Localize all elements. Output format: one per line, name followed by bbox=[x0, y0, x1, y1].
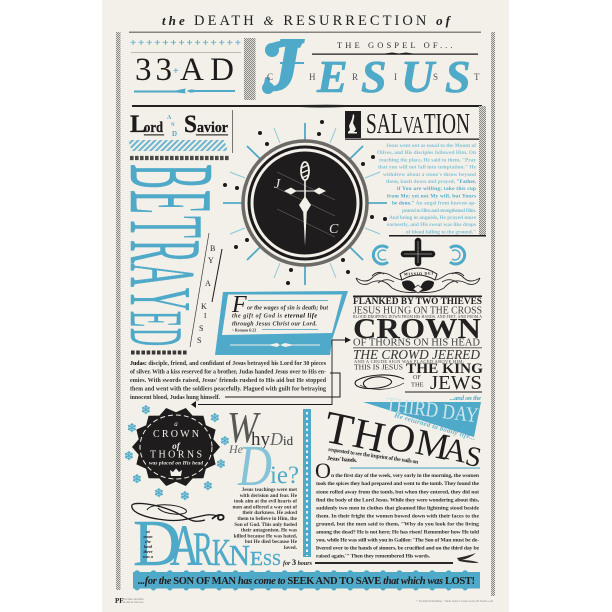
small letters: Christ: H bbox=[309, 72, 316, 82]
flourish: over Darkness bbox=[132, 503, 224, 521]
left patterned border bbox=[116, 32, 120, 590]
text: Crown headline stack: CROWN bbox=[353, 313, 481, 345]
text: Crown headline stack: JESUS HUNG ON THE CROSS bbox=[353, 306, 482, 316]
badge: a crown of thorns: CROWN bbox=[153, 429, 199, 440]
text: why did he die paragraph: took aim at the evil hearts of bbox=[234, 499, 297, 505]
title: Betrayed bbox=[104, 164, 239, 346]
text: why did he die paragraph: but He died because He bbox=[245, 539, 298, 545]
heading: Thomas: H bbox=[349, 410, 389, 462]
snowflake thorns: ❄ bbox=[127, 421, 137, 435]
hatched vertical block bbox=[244, 38, 256, 100]
text: Gethsemane: that you will not fall into temptation." He bbox=[378, 165, 477, 171]
snowflake thorns: ❄ bbox=[124, 449, 134, 463]
heading: Lord and Savior: avior bbox=[197, 120, 228, 136]
text: Gethsemane: Jesus went out as usual to the Mount of bbox=[386, 143, 476, 149]
by a kiss: S bbox=[199, 324, 203, 333]
heading: Jesus bbox=[262, 23, 471, 107]
panel: Romans quote: the gift of God is eternal life bbox=[232, 314, 317, 320]
text: first day paragraph: livered over to the hands of sinners, be crucified and on the third day be bbox=[316, 546, 479, 552]
heading: Why did he die: W bbox=[227, 403, 261, 452]
heading: Lord and Savior: D bbox=[172, 130, 177, 138]
heading: Darkness: R bbox=[193, 523, 213, 576]
emblem: dagger compass bbox=[223, 120, 387, 285]
text: first day paragraph: among the dead? He is not here; He has risen! Remember how He told bbox=[316, 530, 480, 536]
text: why did he die paragraph: their darkness. He asked bbox=[242, 510, 297, 516]
text: why did he die paragraph: loved. bbox=[284, 545, 298, 551]
heading: Why did he die bbox=[227, 403, 299, 498]
heading: Lord and Savior: N bbox=[171, 123, 175, 128]
heading: Salvation: SALVATION bbox=[366, 108, 470, 140]
text: Judas: emies. With swords raised, Jesus' friends rushed to His aid but He stopped bbox=[130, 378, 327, 384]
badge: a crown of thorns: a bbox=[174, 420, 178, 428]
text: Crown headline stack: THE KING bbox=[406, 361, 483, 377]
snowflake thorns: ❄ bbox=[203, 479, 213, 493]
banner: for the son of man bbox=[133, 572, 480, 588]
by a kiss: S bbox=[197, 336, 201, 345]
title: Betrayed: E bbox=[114, 311, 197, 327]
panel: Romans quote: F bbox=[231, 292, 247, 318]
heading: Why did he die: He bbox=[228, 442, 244, 456]
icon: crown bbox=[170, 468, 182, 476]
row of crosses: ++++++++++++++ bbox=[130, 37, 241, 49]
rule with swoosh bbox=[315, 553, 479, 564]
thick divider bbox=[132, 105, 482, 108]
badge: a crown of thorns: of bbox=[172, 441, 181, 451]
dot row bbox=[130, 156, 230, 160]
heading: Why did he die: ie? bbox=[270, 462, 299, 489]
heading: Why did he die: D bbox=[237, 433, 272, 498]
by a kiss: K bbox=[201, 302, 207, 311]
text: Gethsemane: peared to Him and strengthened Him. bbox=[402, 208, 477, 214]
snowflake thorns: ❄ bbox=[154, 486, 164, 500]
rings bbox=[243, 141, 367, 265]
teal rays bbox=[223, 123, 387, 285]
text: and on the: ...and on the bbox=[450, 395, 481, 402]
text: Judas: of silver. With a kiss reserved for a brother, Judas handed Jesus over to His en- bbox=[130, 370, 326, 376]
text: why did he die paragraph: men and offered a way out of bbox=[233, 504, 297, 510]
title: Betrayed: R bbox=[108, 240, 222, 263]
panel: 33 AD: + bbox=[173, 66, 179, 77]
heading: Darkness bbox=[133, 507, 281, 580]
icon: cross with banner bbox=[356, 241, 480, 293]
text: Gethsemane: them, knelt down and prayed, "Father, bbox=[386, 179, 477, 185]
text: Judas: them and went with the soldiers peacefully. Plagued with guilt for betraying bbox=[130, 386, 326, 392]
rule under Gethsemane bbox=[389, 235, 486, 236]
title: Betrayed: B bbox=[104, 164, 239, 189]
text: first day paragraph: them. In their fright the women bowed down with their faces to the bbox=[316, 514, 479, 520]
text: Judas bbox=[130, 361, 327, 401]
text: Crown headline stack: OF THORNS ON HIS HEAD bbox=[353, 338, 480, 348]
arrow from quote bbox=[332, 337, 351, 343]
heading: Jesus: S bbox=[361, 51, 387, 102]
top rule bbox=[129, 32, 481, 33]
text: first day paragraph: ground, but the men said to them, "Why do you look for the living bbox=[316, 522, 479, 528]
text: why did he die paragraph: their antagonism. He was bbox=[241, 528, 297, 534]
text: why did he die paragraph bbox=[233, 487, 298, 551]
small letters: Christ: R bbox=[352, 72, 358, 82]
vertical rule bbox=[231, 110, 234, 153]
text: first day paragraph bbox=[315, 458, 480, 560]
heading: Jesus: E bbox=[316, 51, 348, 102]
black dots bbox=[223, 120, 387, 285]
tiny text inside D: at bbox=[146, 529, 150, 534]
tiny text inside D bbox=[143, 529, 154, 559]
poster background bbox=[102, 0, 509, 612]
text: Crown headline stack: THE bbox=[411, 382, 424, 388]
text: requested to see: requested to see the imprint of the nails on bbox=[328, 447, 419, 466]
text: first day paragraph: n the first day of the week, very early in the morning, the women bbox=[331, 473, 480, 479]
banner bbox=[400, 268, 437, 280]
panel: Romans quote: ~ Romans 6:23 bbox=[232, 328, 256, 332]
text: why did he die paragraph: Son of God. This only fueled bbox=[234, 522, 297, 528]
heading: Darkness: N bbox=[229, 541, 250, 572]
text: Crown headline stack: THIS IS JESUS bbox=[354, 362, 403, 372]
hatched right block bbox=[479, 106, 486, 235]
by a kiss: A bbox=[205, 279, 211, 288]
text: requested to see: Jesus' hands. bbox=[327, 456, 358, 464]
title: Betrayed: Y bbox=[111, 288, 208, 311]
33 AD text: 33 bbox=[135, 52, 172, 88]
connector lines from Judas bbox=[191, 340, 340, 408]
heading: Why did he die: D bbox=[269, 429, 283, 449]
small letters: Christ bbox=[267, 72, 480, 82]
text: first day paragraph: you, while He was still with you in Galilee: 'The Son of Man must be de- bbox=[316, 538, 479, 544]
banner: for the son of man: ...for the SON OF MAN has come to SEEK AND TO SAVE that which was LOST! bbox=[138, 576, 475, 587]
tiny text inside D: was a bbox=[143, 554, 154, 559]
heading: Why did he die: hy bbox=[251, 429, 270, 450]
snowflake thorns: ❄ bbox=[180, 489, 190, 503]
icon: cross with banner: MISSIO DEI bbox=[404, 270, 433, 276]
panel: third day bbox=[363, 392, 481, 442]
heading: Lord and Savior bbox=[130, 111, 228, 138]
heading: Why did he die: id bbox=[283, 433, 294, 448]
text: Crown headline stack: BLOOD DROPPING DOWN FROM HIS HANDS, AND FEET, AND FROM A bbox=[353, 315, 482, 320]
heading: Lord and Savior: L bbox=[130, 111, 147, 138]
snowflake thorns bbox=[124, 403, 230, 503]
teal flourish bbox=[134, 88, 235, 94]
text: Gethsemane: from Me; yet not My will, but Yours bbox=[387, 193, 476, 199]
text: Gethsemane: reaching the place, He said to them, "Pray bbox=[379, 157, 476, 163]
small letters: Christ: T bbox=[474, 72, 480, 82]
tiny text inside D: the bbox=[145, 539, 151, 544]
panel: 33 AD: AD bbox=[180, 52, 234, 88]
text: why did he die paragraph: them to believe in Him, the bbox=[237, 516, 298, 522]
text: Gethsemane: Olives, and His disciples followed Him. On bbox=[377, 150, 476, 156]
heading: Jesus: S bbox=[445, 51, 471, 102]
snowflake thorns: ❄ bbox=[220, 434, 230, 448]
heading: Lord and Savior: A bbox=[167, 115, 172, 121]
by a kiss: Y bbox=[208, 256, 214, 265]
heading: Lord and Savior: S bbox=[184, 111, 197, 138]
letters J and C: J bbox=[274, 177, 281, 192]
text: first day paragraph: O bbox=[315, 458, 331, 483]
publisher logo: POSTER FOUNDRY bbox=[123, 598, 144, 601]
title: Betrayed: E bbox=[105, 190, 238, 214]
text: first day paragraph: took the spices they had prepared and went to the tomb. They found the bbox=[316, 481, 479, 487]
publisher logo: PF bbox=[115, 597, 124, 605]
snowflake thorns: ❄ bbox=[132, 472, 142, 486]
text: first day paragraph: find the body of the Lord Jesus. While they were wondering about this, bbox=[316, 497, 480, 503]
title: the DEATH & RESURRECTION of bbox=[162, 13, 452, 29]
teal dotted vertical strip bbox=[303, 409, 311, 557]
snowflake thorns: ❄ bbox=[141, 403, 151, 417]
text: Judas: innocent blood, Judas hung himself. bbox=[130, 395, 221, 401]
small letters: Christ: S bbox=[433, 72, 438, 82]
heading: Thomas bbox=[320, 401, 484, 474]
text: Crown headline stack: THE CROWD JEERED bbox=[353, 348, 480, 363]
diagonal guide lines bbox=[277, 172, 335, 237]
text: why did he die paragraph: killed because He was hated, bbox=[234, 533, 298, 539]
panel: third day: THIRD DAY bbox=[384, 392, 480, 427]
panel: 33 AD bbox=[130, 37, 241, 94]
panel: third day: He returned to bodily life... bbox=[392, 412, 476, 442]
text: Gethsemane: if You are willing; take this cup bbox=[397, 186, 476, 192]
heading: Jesus: J bbox=[263, 23, 304, 107]
heading: Darkness: S bbox=[263, 550, 272, 569]
text: D bbox=[114, 328, 197, 346]
teal hatch band bbox=[128, 140, 228, 151]
tiny text inside D: noon bbox=[143, 534, 153, 539]
heading: Jesus: U bbox=[401, 51, 437, 102]
tiny text inside D: land bbox=[144, 544, 153, 549]
publisher logo: MADE IN THE USA bbox=[123, 601, 144, 604]
title: Betrayed: T bbox=[108, 216, 225, 238]
heading: Thomas: A bbox=[441, 430, 471, 470]
scrollwork bbox=[356, 272, 480, 292]
panel: Romans quote: through Jesus Christ our Lord. bbox=[232, 322, 318, 328]
heading: Thomas: T bbox=[320, 401, 358, 457]
text: Crown headline stack: OF bbox=[413, 375, 421, 381]
snowflake thorns: ❄ bbox=[216, 457, 226, 471]
copyright: © Pyramid Publishing · Small under License from 2D Studio.com bbox=[416, 600, 494, 603]
heading: Gospel of: THE GOSPEL OF... bbox=[337, 40, 454, 50]
dot row under Betrayed bbox=[131, 350, 187, 354]
heading: Darkness: S bbox=[272, 550, 281, 569]
heading: Thomas: O bbox=[382, 413, 420, 463]
text: Crown headline stack: JEWS bbox=[430, 372, 482, 394]
emblem: dagger compass: C bbox=[329, 222, 339, 237]
panel: Romans quote bbox=[215, 291, 348, 355]
by a kiss: I bbox=[204, 312, 207, 320]
icon: dagger bbox=[284, 162, 326, 246]
text: why did he die paragraph: with derision and fear. He bbox=[240, 493, 298, 499]
publisher logo bbox=[115, 597, 144, 605]
text: Gethsemane: of blood falling to the ground." bbox=[406, 229, 476, 235]
cross bbox=[404, 241, 432, 263]
panel: Romans quote: or the wages of sin is death; but bbox=[247, 306, 328, 312]
small letters: Christ: I bbox=[394, 72, 397, 82]
heading: Thomas: M bbox=[412, 422, 453, 469]
text: Gethsemane: And being in anguish, He prayed more bbox=[389, 215, 477, 221]
badge: a crown of thorns: was placed on His head bbox=[149, 460, 203, 466]
tiny text inside D: there bbox=[143, 549, 153, 554]
right patterned border bbox=[491, 32, 495, 596]
text: Gethsemane: earnestly, and His sweat was like drops bbox=[387, 222, 476, 228]
heading: Darkness: D bbox=[133, 507, 181, 580]
text: Crown headline stack: FLANKED BY TWO THIEVES bbox=[353, 297, 482, 307]
text: Crown headline stack bbox=[353, 296, 483, 394]
heading: Darkness: E bbox=[250, 548, 263, 570]
badge: a crown of thorns: THORNS bbox=[150, 450, 202, 460]
text: Gethsemane bbox=[377, 143, 477, 235]
text: Judas: Judas: disciple, friend, and confidant of Jesus betrayed his Lord for 30 pieces bbox=[130, 361, 327, 367]
text: first day paragraph: suddenly two men in clothes that gleamed like lightning stood beside bbox=[316, 506, 479, 512]
small letters: Christ: C bbox=[267, 72, 273, 82]
flourish: under the crown stack bbox=[355, 375, 404, 389]
text: Gethsemane: withdrew about a stone's throw beyond bbox=[383, 172, 476, 178]
text: for 3 hours: for 3 hours bbox=[283, 557, 313, 567]
text: Gethsemane: be done." An angel from heaven ap- bbox=[392, 201, 476, 207]
heading: Lord and Savior: ord bbox=[144, 120, 164, 136]
title: Betrayed: A bbox=[110, 263, 214, 287]
snowflake thorns: ❄ bbox=[210, 411, 220, 425]
heading: Darkness: K bbox=[212, 532, 231, 574]
by a kiss: B bbox=[210, 244, 215, 253]
icon: praying figure bbox=[348, 114, 357, 134]
by a kiss bbox=[190, 233, 222, 347]
text: Crown headline stack: AND A CRUDE SIGN WAS PLACED ABOVE HIM: bbox=[354, 359, 464, 364]
text: first day paragraph: stone rolled away from the tomb, but when they entered, they did not bbox=[316, 489, 479, 495]
text: first day paragraph: raised again.'" Then they remembered His words. bbox=[316, 554, 431, 560]
badge: a crown of thorns bbox=[132, 408, 220, 486]
text: why did he die paragraph: Jesus teachings were met bbox=[242, 487, 297, 493]
teal rule above Easter text bbox=[350, 468, 480, 469]
heading: Thomas: S bbox=[463, 441, 484, 474]
heading: Darkness: A bbox=[170, 513, 199, 578]
teal swirls bbox=[373, 246, 465, 264]
